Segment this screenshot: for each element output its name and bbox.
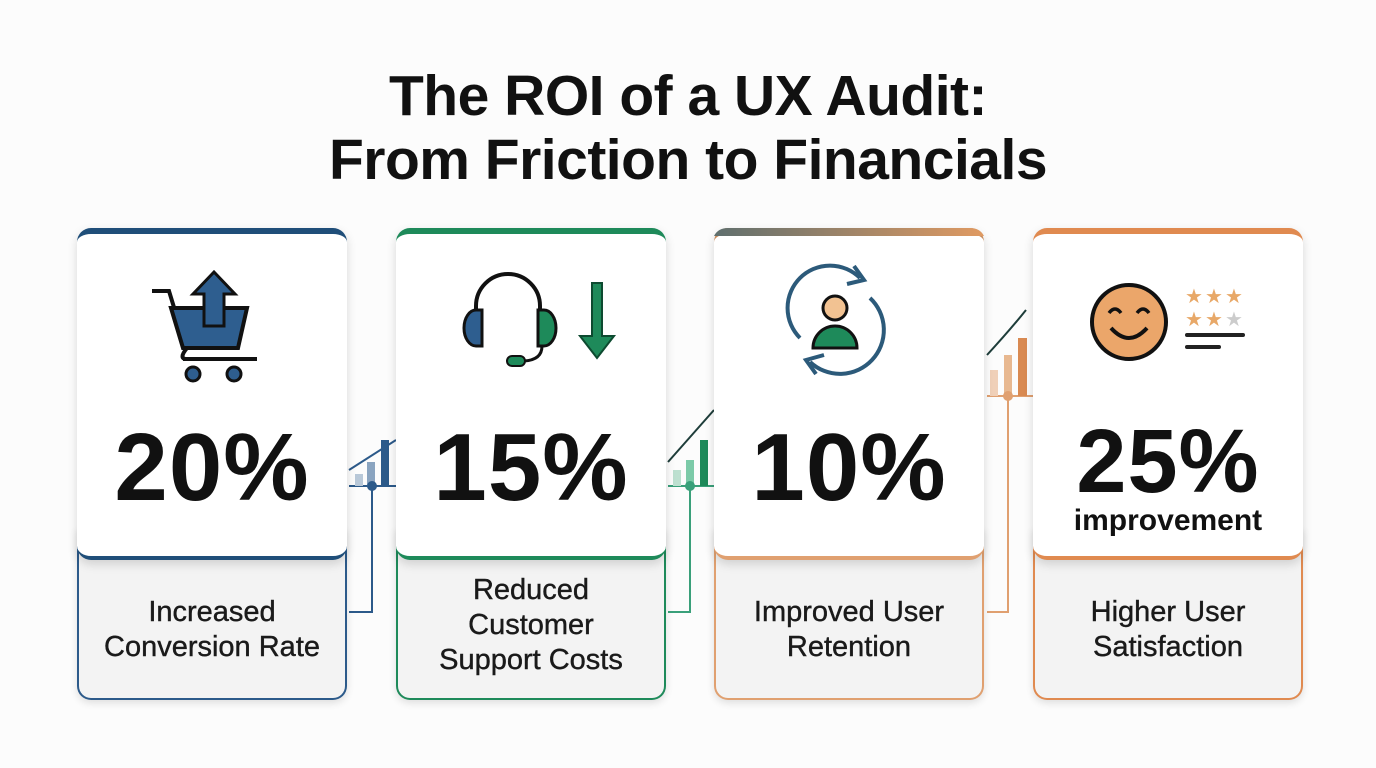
label xyxy=(439,574,623,676)
label xyxy=(1091,596,1246,663)
label: Conversion Rate xyxy=(104,631,320,663)
stat 20%: 20% xyxy=(114,414,310,521)
icon: smiley rating: ★ xyxy=(1225,309,1243,331)
icon: headset xyxy=(462,272,616,367)
icon: cart xyxy=(152,270,257,382)
icon: smiley rating: ★ xyxy=(1185,309,1203,331)
title: The ROI of a UX Audit: xyxy=(389,64,987,128)
card 4: satisfaction: improvement xyxy=(1074,504,1262,537)
icon: smiley rating: ★ xyxy=(1205,286,1223,308)
label xyxy=(104,596,320,663)
card 1: conversion xyxy=(72,228,352,705)
label: Higher User xyxy=(1091,596,1245,628)
icon: user cycle xyxy=(786,264,886,376)
label: Retention xyxy=(787,631,911,663)
icon: smiley rating: ★ xyxy=(1225,286,1243,308)
stat 15%: 15% xyxy=(433,414,629,521)
label: Reduced xyxy=(473,574,589,606)
card 2: support xyxy=(391,228,671,705)
label xyxy=(754,596,944,663)
stat 25% improvement: 25% xyxy=(1076,412,1260,512)
card 3: retention xyxy=(709,228,989,705)
icon: smiley rating xyxy=(1090,283,1245,361)
icon: smiley rating: ★ xyxy=(1205,309,1223,331)
label: Increased xyxy=(148,596,276,628)
icon: smiley rating: ★ xyxy=(1185,286,1203,308)
card 4: satisfaction xyxy=(1028,228,1308,705)
title: From Friction to Financials xyxy=(329,128,1047,192)
label: Improved User xyxy=(754,596,944,628)
title xyxy=(329,64,1047,192)
stat 10%: 10% xyxy=(751,414,947,521)
label: Customer xyxy=(468,609,594,641)
label: Satisfaction xyxy=(1093,631,1243,663)
label: Support Costs xyxy=(439,644,623,676)
